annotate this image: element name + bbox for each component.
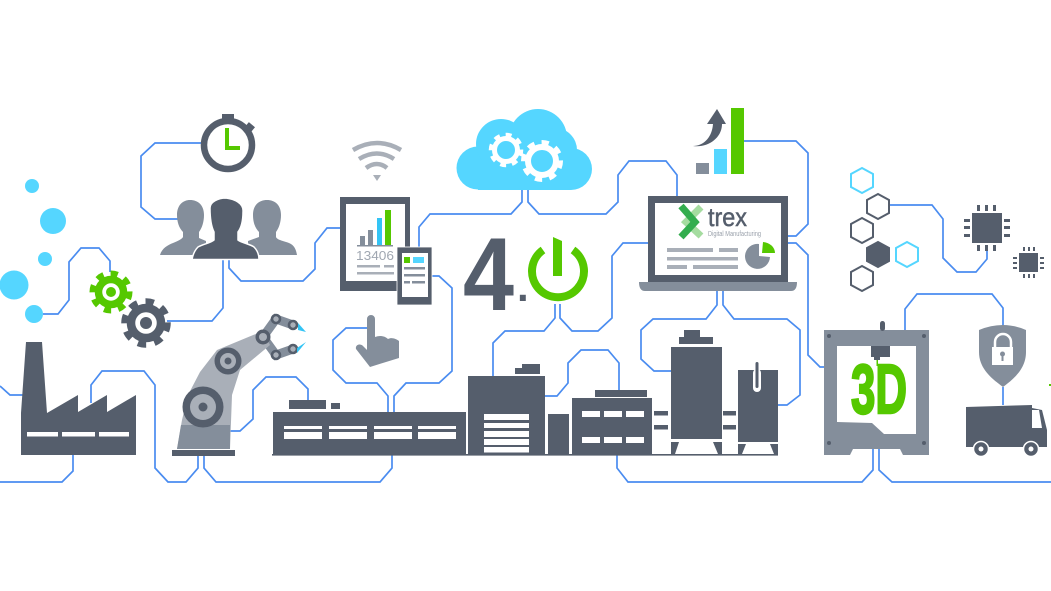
logo text: trex bbox=[708, 202, 747, 232]
icon: robot arm bbox=[172, 315, 306, 456]
connector lines bbox=[0, 141, 1051, 482]
icon: power symbol bbox=[532, 237, 584, 297]
bar chart bbox=[357, 210, 393, 246]
icon: hexagons bbox=[851, 168, 918, 291]
logo mark bbox=[681, 206, 701, 237]
icon: security shield bbox=[979, 325, 1026, 387]
heading: 4.0: . bbox=[517, 263, 529, 310]
heading: 4.0 bbox=[463, 217, 584, 333]
icon: stopwatch bbox=[204, 114, 255, 169]
icon: growth bars and arrow bbox=[693, 108, 744, 174]
icon: tanks bbox=[671, 330, 778, 454]
logo tagline: Digital Manufacturing bbox=[708, 229, 761, 238]
pie chart bbox=[745, 242, 775, 269]
icon: tablet dashboard bbox=[340, 197, 410, 291]
ground line bbox=[272, 454, 778, 456]
icon: green gear bbox=[92, 274, 130, 310]
person centre bbox=[192, 198, 259, 260]
icon: warehouse building bbox=[468, 364, 569, 454]
icon: phone bbox=[397, 247, 432, 305]
icon: wifi bbox=[353, 143, 401, 181]
icon: team of people bbox=[160, 198, 297, 260]
bubbles bbox=[0, 179, 66, 323]
person left bbox=[160, 200, 206, 255]
heading: 4.0: 4 bbox=[463, 217, 514, 333]
green speck at the edge bbox=[1049, 384, 1051, 386]
icon: truck bbox=[966, 405, 1047, 456]
icon: laptop bbox=[639, 196, 797, 291]
icon: cloud with gears bbox=[456, 109, 592, 190]
number: 13406 bbox=[356, 249, 394, 263]
person right bbox=[248, 200, 297, 255]
icon: long production building bbox=[273, 400, 466, 455]
icon: large chip bbox=[964, 205, 1010, 251]
icon: dark gear bbox=[124, 302, 168, 344]
icon: pointing hand bbox=[356, 315, 399, 367]
icon: office building bbox=[572, 390, 668, 454]
icon: small chip bbox=[1013, 247, 1044, 278]
icon: factory bbox=[21, 342, 136, 455]
icon: 3D printer bbox=[824, 321, 929, 455]
3D label: 3D bbox=[851, 350, 907, 428]
